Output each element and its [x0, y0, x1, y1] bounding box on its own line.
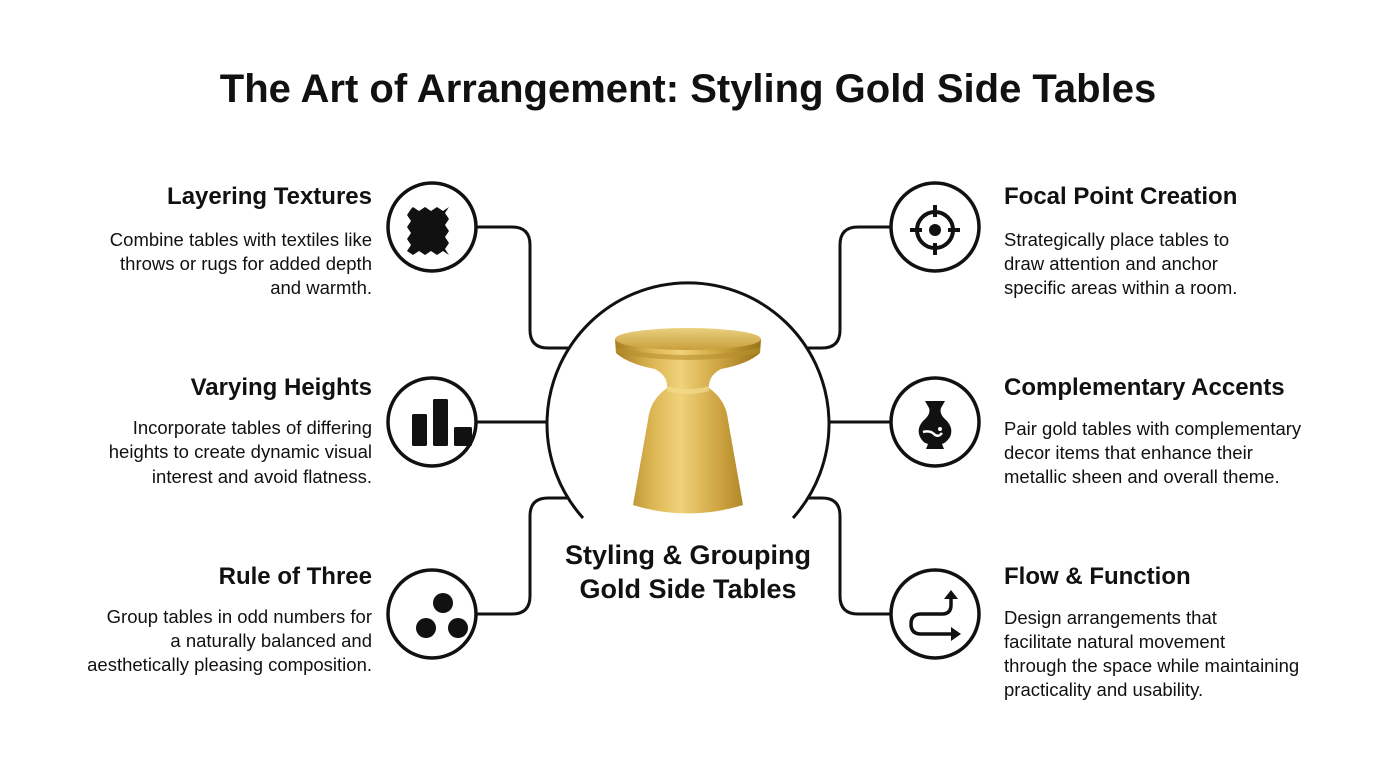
text: varying heights: heights to create dynamic visual	[109, 441, 372, 462]
text: layering textures: Layering Textures	[167, 183, 372, 210]
text: complementary accents: metallic sheen and overall theme.	[1004, 466, 1280, 487]
text: rule of three: a naturally balanced and	[170, 630, 372, 651]
icon: vase	[891, 378, 979, 466]
text: complementary accents: Complementary Accents	[1004, 374, 1285, 401]
text: flow & function: facilitate natural movement	[1004, 631, 1225, 652]
text: varying heights: Incorporate tables of differing	[133, 417, 372, 438]
text: rule of three: aesthetically pleasing composition.	[87, 654, 372, 675]
text: focal point: Strategically place tables to	[1004, 229, 1229, 250]
text: focal point	[1004, 183, 1237, 298]
center label: Gold Side Tables	[579, 574, 797, 604]
text: layering textures	[110, 183, 372, 298]
icon: textures	[388, 183, 476, 271]
title: The Art of Arrangement: Styling Gold Side Tables	[220, 67, 1156, 111]
text: flow & function: Design arrangements that	[1004, 607, 1217, 628]
text: rule of three: Rule of Three	[219, 563, 372, 590]
text: focal point: Focal Point Creation	[1004, 183, 1237, 210]
icon: heights	[388, 378, 476, 466]
text: layering textures: throws or rugs for added depth	[120, 253, 372, 274]
gold side table	[615, 328, 761, 514]
text: flow & function: Flow & Function	[1004, 563, 1191, 590]
text: varying heights: interest and avoid flatness.	[152, 466, 372, 487]
text: rule of three	[87, 563, 372, 675]
text: layering textures: Combine tables with textiles like	[110, 229, 372, 250]
text: complementary accents	[1004, 374, 1302, 487]
text: complementary accents: Pair gold tables with complementary	[1004, 418, 1302, 439]
text: complementary accents: decor items that enhance their	[1004, 442, 1253, 463]
connectors	[477, 227, 891, 614]
text: flow & function: practicality and usability.	[1004, 679, 1203, 700]
text: focal point: draw attention and anchor	[1004, 253, 1218, 274]
text: flow & function: through the space while maintaining	[1004, 655, 1299, 676]
text: varying heights: Varying Heights	[191, 374, 372, 401]
text: varying heights	[109, 374, 372, 487]
center label: Styling & Grouping	[565, 540, 811, 570]
text: rule of three: Group tables in odd numbers for	[107, 606, 372, 627]
text: focal point: specific areas within a room.	[1004, 277, 1237, 298]
icon: target	[891, 183, 979, 271]
icon: three dots	[388, 570, 476, 658]
center label	[565, 540, 811, 604]
icon: flow	[891, 570, 979, 658]
text: flow & function	[1004, 563, 1299, 700]
center arc	[547, 283, 829, 518]
text: layering textures: and warmth.	[270, 277, 372, 298]
